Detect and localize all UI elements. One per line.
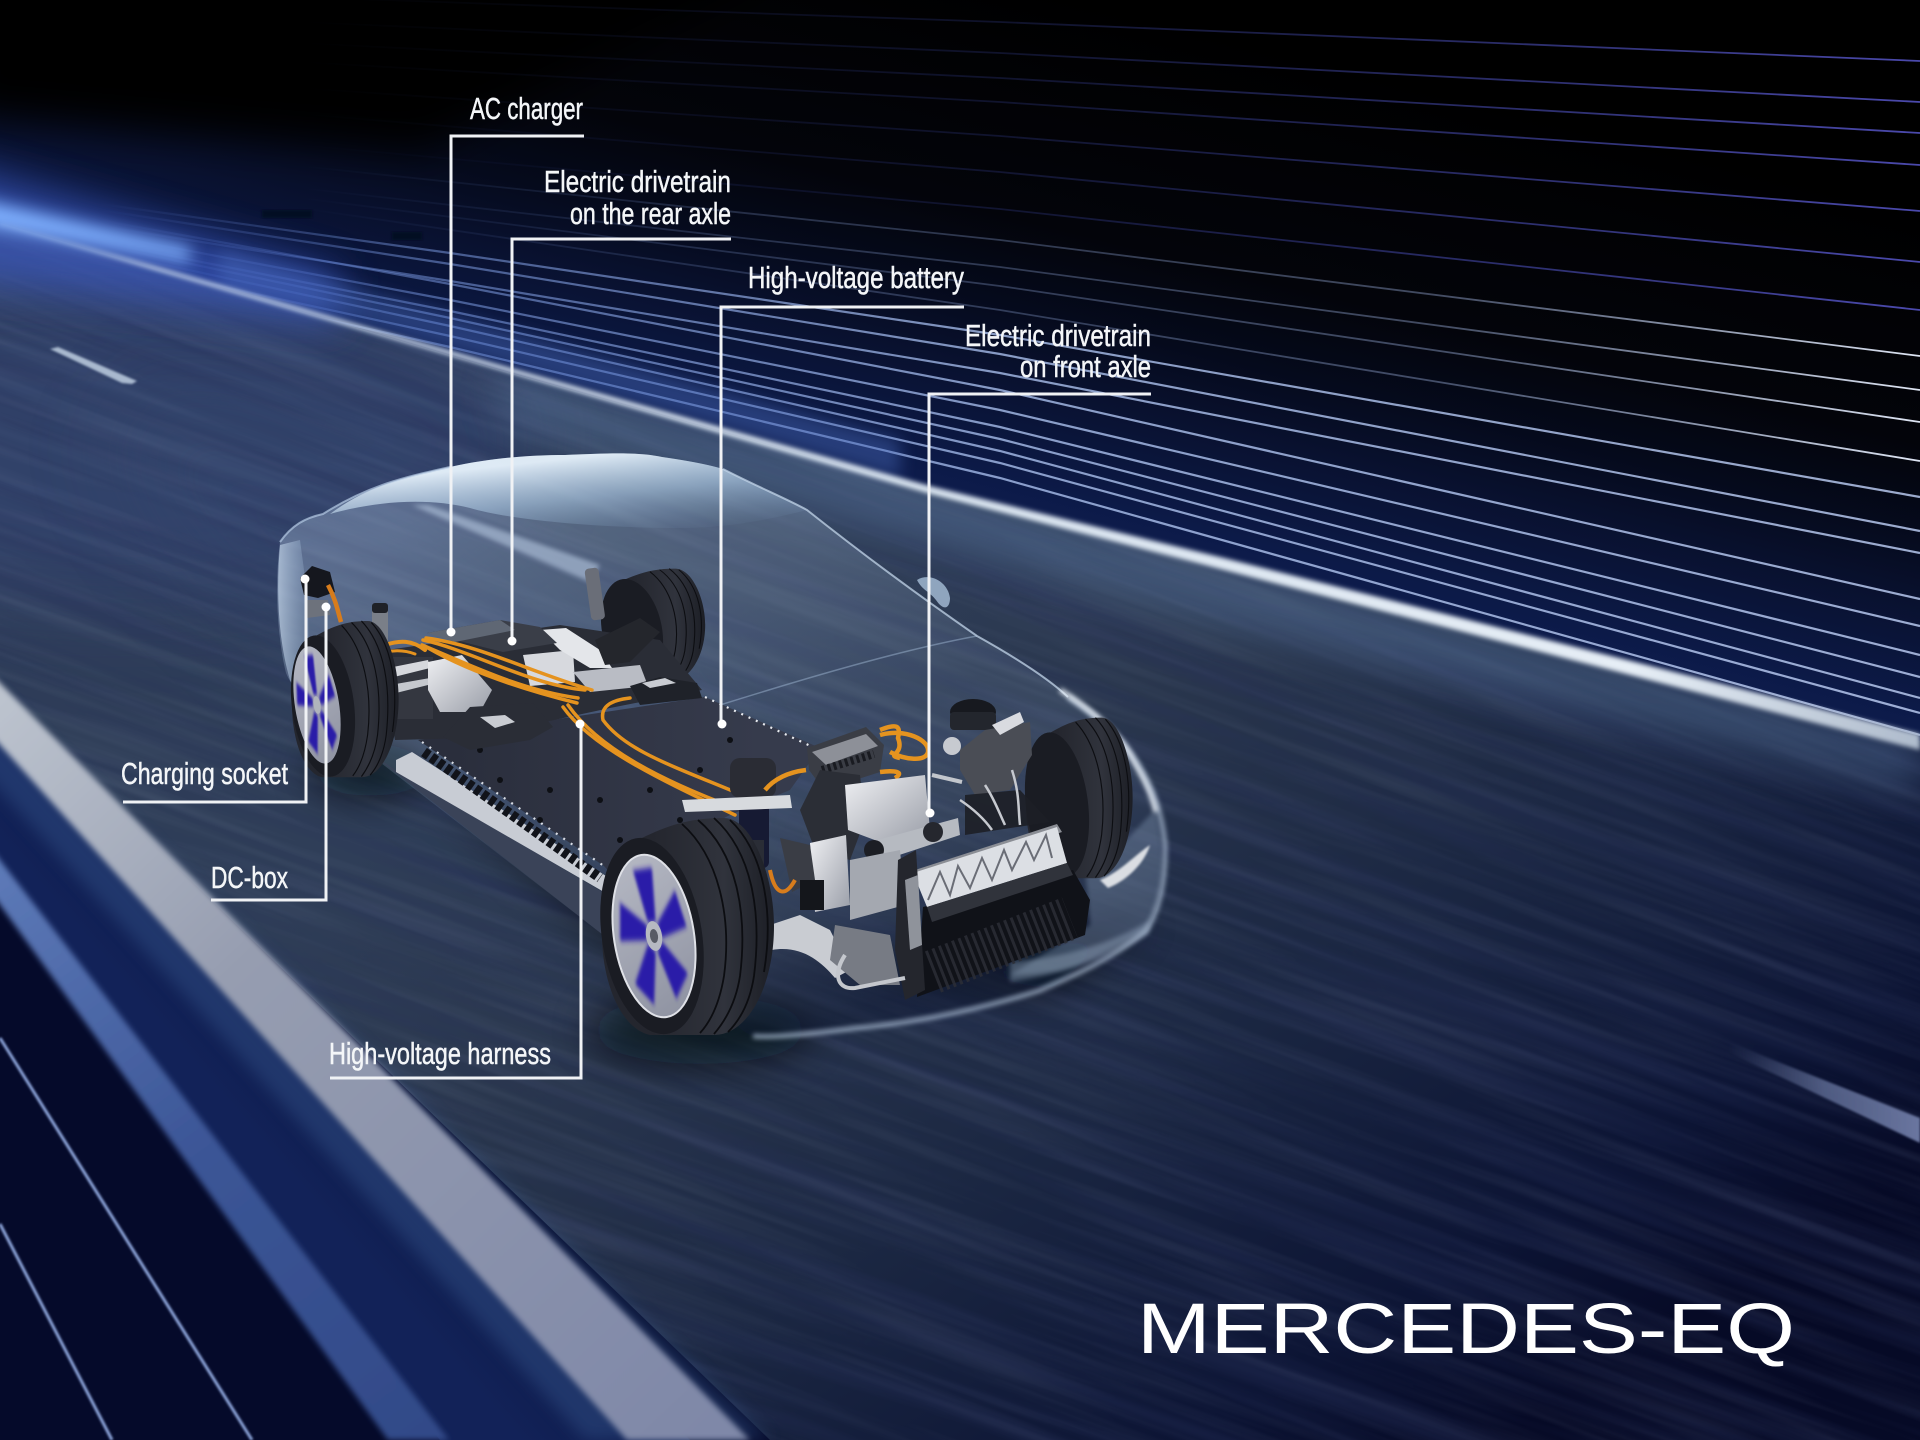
high-voltage battery: [418, 697, 820, 878]
front orange cable loop: [765, 726, 928, 790]
car: [277, 453, 1165, 1064]
callout: electric drivetrain on front axle: on front axle: [1020, 349, 1151, 384]
rear window streak: [412, 505, 600, 582]
white road stripe: [0, 582, 750, 1440]
callout: high-voltage battery: High-voltage battery: [748, 260, 964, 295]
callout: electric drivetrain on front axle: [926, 318, 1151, 818]
callout: electric drivetrain on the rear axle: on the rear axle: [570, 196, 731, 231]
callout: DC-box: [211, 602, 330, 900]
front cooling module: [895, 824, 1090, 1000]
lane dash far: [50, 347, 137, 384]
front glass glow: [753, 697, 1165, 1037]
front inverter box: [807, 727, 884, 790]
charging socket unit: [300, 566, 341, 622]
front strut: [682, 758, 792, 885]
callout: high-voltage battery: [718, 260, 964, 728]
rear fender glass: [278, 540, 310, 720]
callout: charging socket: [121, 574, 310, 802]
callout: electric drivetrain on the rear axle: Electric drivetrain: [544, 164, 731, 199]
battery side strip: [396, 752, 606, 892]
high-voltage orange cables: [385, 638, 735, 815]
background: fan of speed lines: [100, 0, 1920, 735]
background: dark upper-left corner: [0, 0, 800, 150]
road edge bright line: [0, 222, 1920, 750]
lane dash right: [1728, 1042, 1920, 1143]
front lower arm and tube: [770, 915, 905, 988]
background: left blue light glow: [0, 160, 900, 478]
callout: electric drivetrain on the rear axle: [508, 164, 731, 646]
callout: high-voltage harness: High-voltage harness: [329, 1036, 551, 1071]
near rear wheel: [283, 621, 399, 782]
front drive unit: [770, 770, 960, 920]
front damper and reservoir: [932, 699, 1050, 835]
roof highlight: [330, 453, 807, 528]
bumper glass reflections: [1010, 810, 1162, 975]
side mirror: [917, 577, 950, 607]
car shadow: [310, 744, 1150, 1064]
rear drive unit and subframe: [372, 567, 702, 750]
glass edge lines: [280, 467, 450, 542]
callout: high-voltage harness: [329, 720, 584, 1078]
far front wheel: [1017, 718, 1133, 883]
battery lower rail: [360, 745, 607, 938]
glass body: [277, 453, 1165, 1037]
callout: DC-box: DC-box: [211, 860, 288, 895]
windscreen line: [720, 636, 977, 705]
far rear wheel: [593, 569, 705, 685]
lower-left dark lane area: [0, 600, 770, 1440]
callout: electric drivetrain on front axle: Electric drivetrain: [965, 318, 1151, 353]
callout: charging socket: Charging socket: [121, 756, 288, 791]
callout: AC charger: [446, 91, 584, 636]
callout: AC charger: AC charger: [470, 91, 583, 126]
logo: Mercedes-EQ: MERCEDES-EQ: [1137, 1290, 1795, 1369]
near front wheel: [587, 818, 774, 1042]
